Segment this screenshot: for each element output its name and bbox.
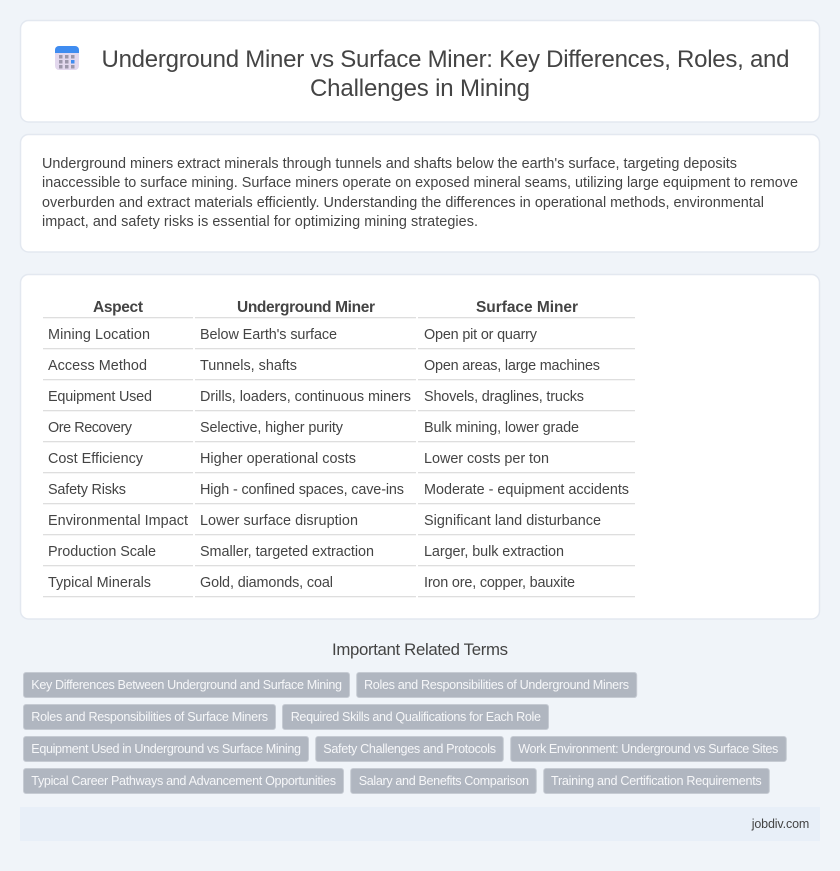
table header: [93, 299, 578, 316]
row: equipment used: Drills, loaders, continuous miners: [200, 389, 411, 405]
intro text block: overburden and extract materials efficiently. Understanding the differences in operational methods, environmental: [42, 195, 764, 211]
intro text block: impact, and safety risks is essential for optimizing mining strategies.: [42, 214, 478, 230]
row: ore recovery: Selective, higher purity: [200, 420, 344, 436]
row: access method: Open areas, large machines: [424, 358, 600, 374]
related terms tags: [24, 672, 786, 794]
row: safety risks: High - confined spaces, cave-ins: [200, 482, 404, 498]
row: access method: Tunnels, shafts: [200, 358, 297, 374]
title: Challenges in Mining: [310, 75, 530, 102]
tag: work environment: Work Environment: Underground vs Surface Sites: [518, 742, 778, 756]
intro text block: [42, 156, 798, 230]
row: typical minerals: Iron ore, copper, bauxite: [424, 575, 575, 591]
row: environmental impact: Significant land disturbance: [424, 513, 601, 529]
tag: surface roles: [24, 704, 276, 730]
intro text block: inaccessible to surface mining. Surface miners operate on exposed mineral seams, utilizing large equipment to remove: [42, 175, 798, 191]
tag: key differences: Key Differences Between Underground and Surface Mining: [31, 678, 342, 692]
tag: underground roles: Roles and Responsibilities of Underground Miners: [364, 678, 629, 692]
row: cost efficiency: Lower costs per ton: [424, 451, 549, 467]
tag: career pathways: [24, 768, 344, 794]
tag: equipment: [24, 736, 308, 762]
tag: underground roles: [357, 672, 637, 698]
row: cost efficiency: Cost Efficiency: [48, 451, 144, 467]
tag: skills: [282, 704, 548, 730]
panel: introduction: [20, 134, 820, 252]
row: typical minerals: Typical Minerals: [48, 575, 151, 591]
panel: comparison table: [20, 274, 820, 619]
row: access method: Access Method: [48, 358, 147, 374]
row: typical minerals: [48, 575, 575, 591]
row: mining location: Open pit or quarry: [424, 327, 538, 343]
row: equipment used: Shovels, draglines, trucks: [424, 389, 584, 405]
tag: salary: [351, 768, 536, 794]
intro text block: Underground miners extract minerals through tunnels and shafts below the earth's surface, targeting deposits: [42, 156, 737, 172]
footer: [20, 807, 820, 841]
row: production scale: Smaller, targeted extraction: [200, 544, 374, 560]
row: environmental impact: [48, 513, 601, 529]
tag: surface roles: Roles and Responsibilities of Surface Miners: [31, 710, 268, 724]
table header: Underground Miner: [237, 299, 375, 316]
row: equipment used: Equipment Used: [48, 389, 152, 405]
row: typical minerals: Gold, diamonds, coal: [200, 575, 333, 591]
row: environmental impact: Environmental Impact: [48, 513, 188, 529]
icon: calendar: [55, 46, 79, 70]
row: production scale: [48, 544, 564, 560]
tag: safety: [316, 736, 503, 762]
footer source text: jobdiv.com: [751, 817, 809, 831]
row: ore recovery: Ore Recovery: [48, 420, 133, 436]
tag: skills: Required Skills and Qualifications for Each Role: [291, 710, 541, 724]
row: cost efficiency: Higher operational costs: [200, 451, 356, 467]
tag: training: Training and Certification Requirements: [551, 774, 762, 788]
row: mining location: [48, 327, 538, 343]
row: safety risks: Safety Risks: [48, 482, 126, 498]
row: mining location: Below Earth's surface: [200, 327, 337, 343]
title: Underground Miner vs Surface Miner: Key Differences, Roles, and: [102, 46, 790, 73]
row: ore recovery: [48, 420, 579, 436]
row: equipment used: [48, 389, 584, 405]
row: safety risks: [48, 482, 629, 498]
tag: key differences: [24, 672, 350, 698]
tag: career pathways: Typical Career Pathways and Advancement Opportunities: [31, 774, 336, 788]
row: environmental impact: Lower surface disruption: [200, 513, 358, 529]
row: production scale: Larger, bulk extraction: [424, 544, 564, 560]
related terms heading: Important Related Terms: [332, 640, 508, 659]
row: safety risks: Moderate - equipment accidents: [424, 482, 629, 498]
title: [102, 46, 790, 102]
row: ore recovery: Bulk mining, lower grade: [424, 420, 579, 436]
row: mining location: Mining Location: [48, 327, 150, 343]
row: cost efficiency: [48, 451, 549, 467]
tag: salary: Salary and Benefits Comparison: [359, 774, 529, 788]
header panel: [20, 20, 820, 122]
tag: safety: Safety Challenges and Protocols: [323, 742, 496, 756]
tag: training: [544, 768, 769, 794]
row: access method: [48, 358, 600, 374]
tag: equipment: Equipment Used in Underground vs Surface Mining: [31, 742, 301, 756]
row: production scale: Production Scale: [48, 544, 156, 560]
table header: Aspect: [93, 299, 143, 316]
table header: Surface Miner: [476, 299, 578, 316]
tag: work environment: [511, 736, 786, 762]
